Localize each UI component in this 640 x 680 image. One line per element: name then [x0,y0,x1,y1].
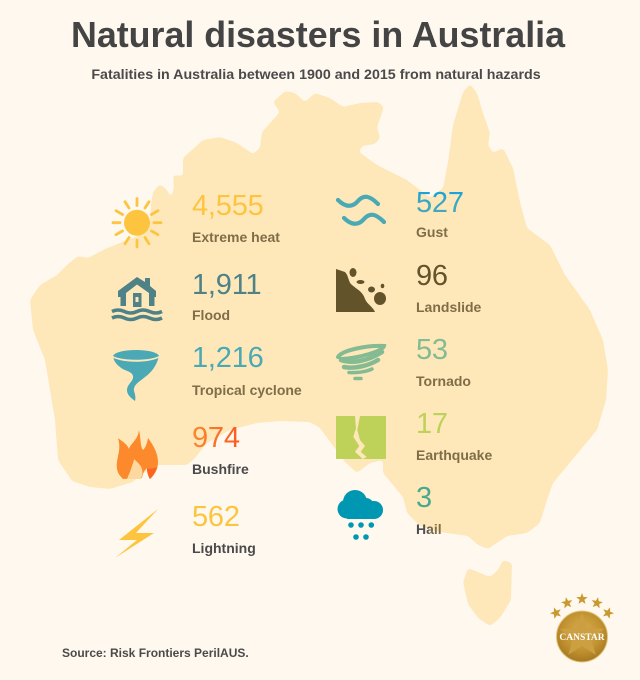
icon: hail cloud [338,490,383,540]
stat: tornado [416,334,471,389]
stat: hail: 3 [416,482,432,514]
icon: lightning bolt [115,509,158,558]
stat: landslide [416,260,482,315]
stat: lightning: 562 [192,501,240,533]
logo: CANSTAR badge [549,593,615,662]
stat: gust: Gust [416,224,448,240]
icon: tornado [338,346,384,378]
stat: earthquake: 17 [416,408,448,440]
stat: landslide: Landslide [416,299,482,315]
stat: landslide: 96 [416,260,448,292]
icon: sun [113,198,161,247]
stat: gust: 527 [416,187,464,219]
stat: hail: Hail [416,521,442,537]
map of Australia [30,84,608,626]
stat: extreme heat: 4,555 [192,190,264,222]
stat: earthquake: Earthquake [416,447,492,463]
stat: bushfire: 974 [192,422,240,454]
stat: extreme heat [192,190,280,245]
icon: gust waves [338,197,384,224]
stat: earthquake [416,408,492,463]
stat: hail [416,482,442,537]
icon: landslide [336,268,386,312]
title: Natural disasters in Australia [71,15,566,55]
subtitle: Fatalities in Australia between 1900 and 2015 from natural hazards [91,67,541,83]
stat: gust [416,187,464,240]
stat: lightning: Lightning [192,540,256,556]
stat: bushfire [192,422,249,477]
icon: bushfire flame [117,430,158,479]
stat: tropical cyclone [192,342,302,398]
stat: flood [192,269,261,323]
stat: tropical cyclone: Tropical cyclone [192,382,302,398]
source note: Source: Risk Frontiers PerilAUS. [62,646,249,660]
logo: CANSTAR badge: CANSTAR [559,633,605,643]
stat: extreme heat: Extreme heat [192,229,280,245]
stat: flood: 1,911 [192,269,261,301]
stat: tornado: 53 [416,334,448,366]
icon: earthquake [336,416,386,459]
stat: bushfire: Bushfire [192,461,249,477]
stat: tornado: Tornado [416,373,471,389]
stat: tropical cyclone: 1,216 [192,342,264,374]
icon: tropical cyclone [113,350,159,401]
stat: flood: Flood [192,307,230,323]
icon: flooded house [112,277,162,320]
stat: lightning [192,501,256,556]
